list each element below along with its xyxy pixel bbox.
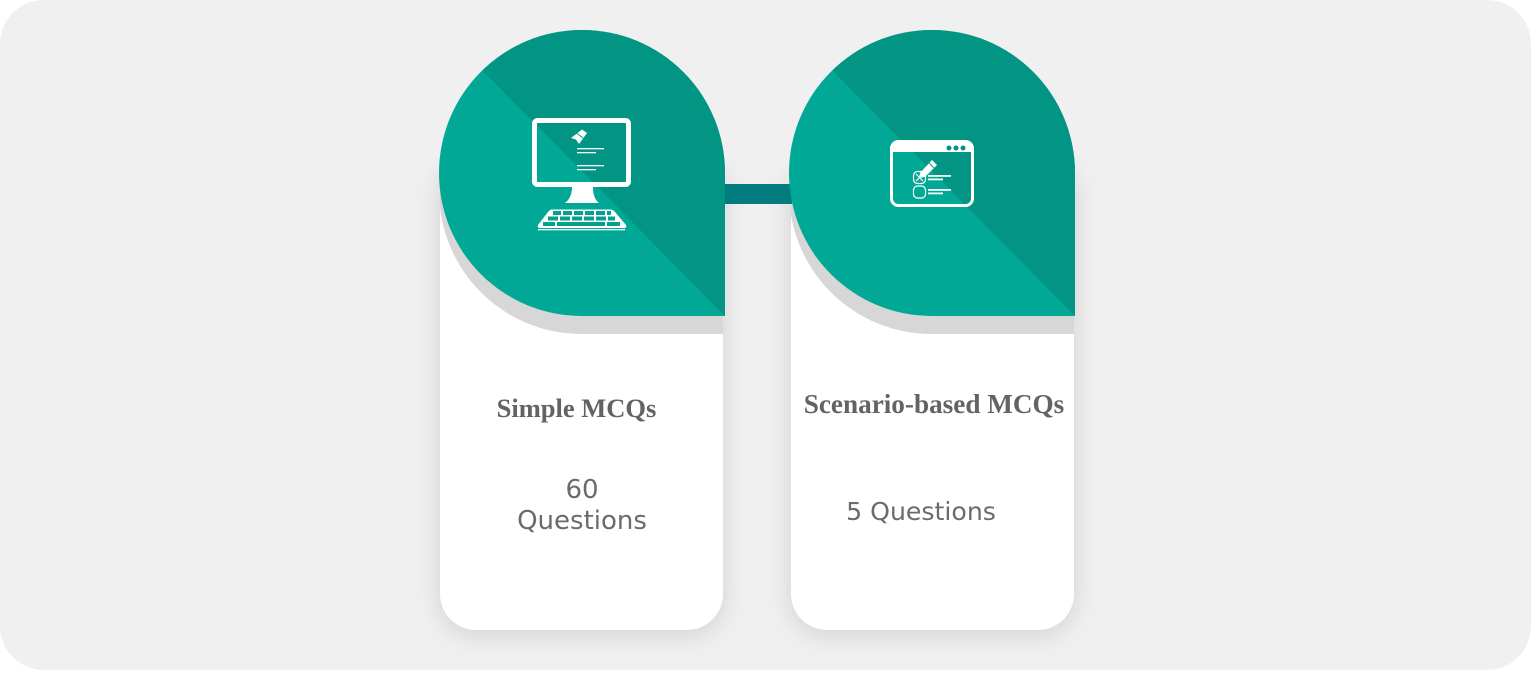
text: 60 Questions: Questions bbox=[517, 506, 647, 536]
drop header: scenario MCQs bbox=[789, 30, 1074, 316]
panel: simple MCQs card bbox=[440, 170, 723, 630]
heading: Scenario-based MCQs: Scenario-based MCQs bbox=[804, 389, 1064, 419]
heading: Simple MCQs: Simple MCQs bbox=[497, 393, 656, 423]
text: 5 Questions: 5 Questions bbox=[846, 497, 996, 526]
text: 60 Questions bbox=[517, 475, 647, 536]
connector bar bbox=[722, 184, 792, 204]
text: 60 Questions: 60 bbox=[565, 475, 599, 505]
panel: scenario-based MCQs card bbox=[791, 170, 1074, 630]
drop header: simple MCQs bbox=[439, 30, 724, 316]
